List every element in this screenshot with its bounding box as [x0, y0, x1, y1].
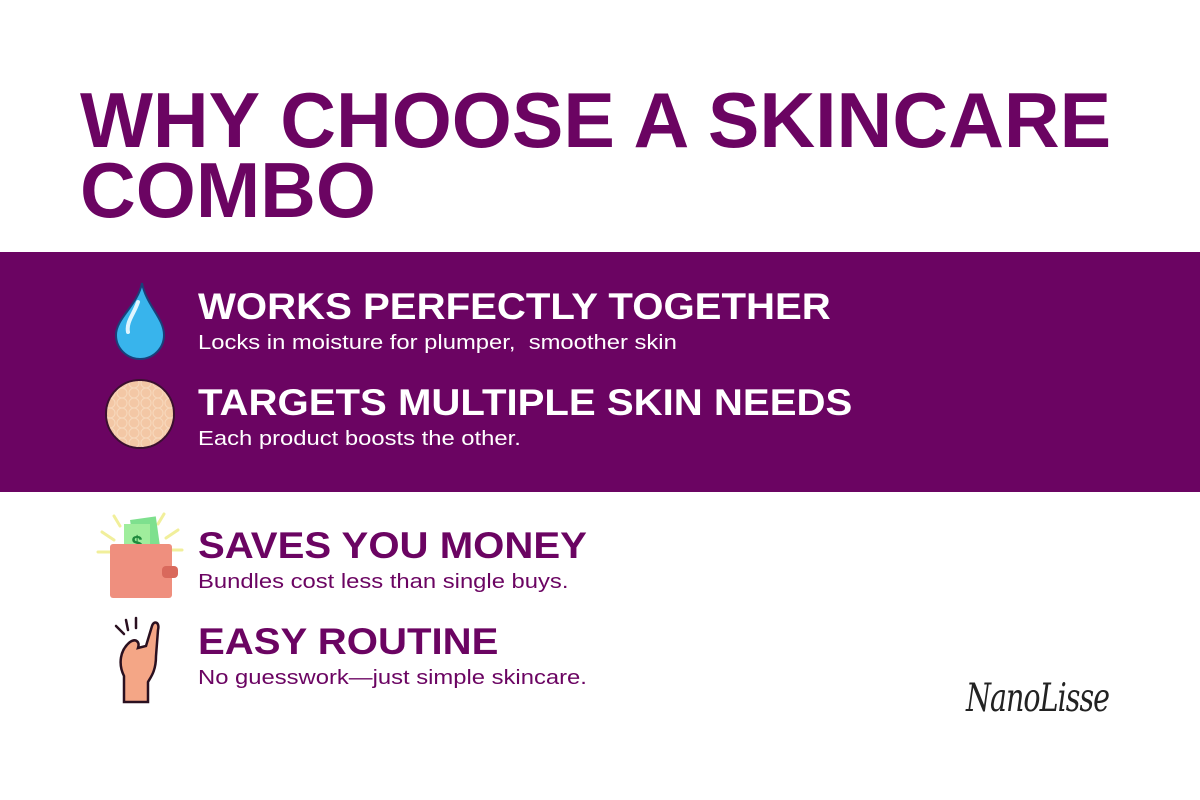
- logo: NanoLisse signature: NanoLisse: [966, 676, 1109, 722]
- item: targets multiple skin needs: [198, 382, 852, 450]
- item: saves you money: SAVES YOU MONEY: [198, 525, 587, 566]
- item: works perfectly together: [198, 286, 831, 354]
- item: easy routine: No guesswork—just simple skincare.: [198, 667, 587, 689]
- item: targets multiple skin needs: TARGETS MULTIPLE SKIN NEEDS: [198, 382, 852, 423]
- item: saves you money: [198, 525, 587, 593]
- icon: snapping hand: [114, 616, 160, 704]
- icon: wallet: $: [131, 533, 143, 555]
- item: works perfectly together: WORKS PERFECTLY TOGETHER: [198, 286, 831, 327]
- item: targets multiple skin needs: Each product boosts the other.: [198, 428, 521, 450]
- item: easy routine: [198, 621, 587, 689]
- icon: water drop: [115, 282, 165, 360]
- icon: wallet: [96, 512, 184, 598]
- title: WHY CHOOSE A SKINCARE: [80, 76, 1111, 164]
- item: saves you money: Bundles cost less than single buys.: [198, 571, 568, 593]
- title: COMBO: [80, 146, 376, 234]
- item: easy routine: EASY ROUTINE: [198, 621, 498, 662]
- title: [80, 76, 1111, 234]
- icon: skin texture: [105, 379, 175, 449]
- item: works perfectly together: Locks in moisture for plumper, smoother skin: [198, 332, 677, 354]
- panel: purple band: [0, 252, 1200, 492]
